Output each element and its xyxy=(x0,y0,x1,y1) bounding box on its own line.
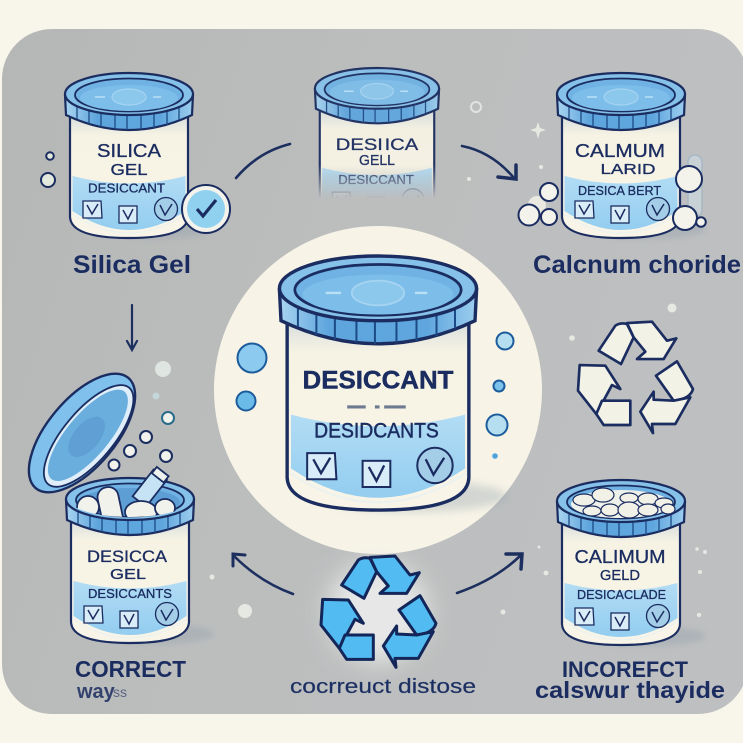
label: silica gel: Silica Gel xyxy=(73,251,191,279)
jar label: silica gel: SILICA xyxy=(97,141,161,161)
desiccant pills in open jar xyxy=(76,466,176,517)
label: correct ways: CORRECT xyxy=(75,656,186,682)
arrow: to incorrect way xyxy=(457,554,522,593)
bubbles: right of central jar xyxy=(486,332,514,459)
jar: central desiccant: DESIDCANTS xyxy=(314,420,439,443)
label: correct ways: ss xyxy=(113,684,127,700)
panel: central highlight circle xyxy=(214,226,542,554)
jar: incorrect way, filled with desiccant: GELD xyxy=(600,568,640,584)
smudged fine print xyxy=(347,406,406,408)
label: incorrect calcium: INCOREFCT xyxy=(562,657,689,682)
bubbles: rising from open jar xyxy=(108,361,174,470)
jar: silica gel: DESICCANT xyxy=(88,180,165,196)
label: correct ways: way xyxy=(76,681,116,703)
jar: correct way, opened with pills: DESICCANTS xyxy=(88,587,172,601)
icon: open lid xyxy=(10,356,154,510)
jar: desiccant gel, top center: GELL xyxy=(359,153,395,169)
jar: central desiccant xyxy=(279,256,507,512)
desiccant pebbles: calcium chloride left xyxy=(518,183,558,226)
jar: incorrect way, filled with desiccant: DESICACLADE xyxy=(577,588,666,602)
label: calcium chloride: Calcnum choride xyxy=(533,251,741,279)
arrow: top left connector xyxy=(236,144,290,178)
jar: desiccant gel, top center: DESICCANT xyxy=(338,173,414,187)
desiccant pebbles in jar xyxy=(573,488,675,518)
bubbles: left of central jar xyxy=(236,344,266,410)
jar: correct way, opened with pills: GEL xyxy=(110,566,146,583)
label: incorrect calcium xyxy=(535,657,725,703)
icon: check badge xyxy=(182,185,230,233)
jar: calcium chloride: DESICA BERT xyxy=(578,184,661,198)
jar: silica gel: GEL xyxy=(110,162,148,179)
icon: recycle, white xyxy=(578,322,693,433)
arrow: silica down xyxy=(127,305,137,350)
sparkles and faint dots xyxy=(210,102,707,618)
jar label: desiccant: DESICCANT xyxy=(303,366,454,394)
jar label: calcium chloride: CALMUM xyxy=(575,141,665,161)
jar label: calcium gel: CALIMUM xyxy=(575,547,665,567)
jar label: desicca gel: DESICCA xyxy=(87,548,167,566)
bubbles: silica gel xyxy=(41,152,55,187)
label: correct ways xyxy=(75,656,186,703)
label: incorrect calcium: calswur thayide xyxy=(535,677,725,703)
jar: silica gel xyxy=(65,73,213,239)
jar: calcium chloride: LARID xyxy=(600,161,656,178)
jar: calcium chloride xyxy=(557,73,705,239)
arrow: to calcium chloride xyxy=(462,146,516,179)
arrow: to correct way xyxy=(233,554,293,594)
label: correct disposal: cocrreuct distose xyxy=(290,676,476,698)
jar: correct way, opened with pills xyxy=(66,478,214,644)
jar: incorrect way, filled with desiccant xyxy=(557,480,705,646)
icon: recycle, blue xyxy=(321,556,436,667)
jar: desiccant gel, top center xyxy=(314,66,440,197)
jar label: desiccant gel: DESI ICA xyxy=(336,136,418,154)
desiccant pebbles: calcium chloride right xyxy=(673,155,706,230)
